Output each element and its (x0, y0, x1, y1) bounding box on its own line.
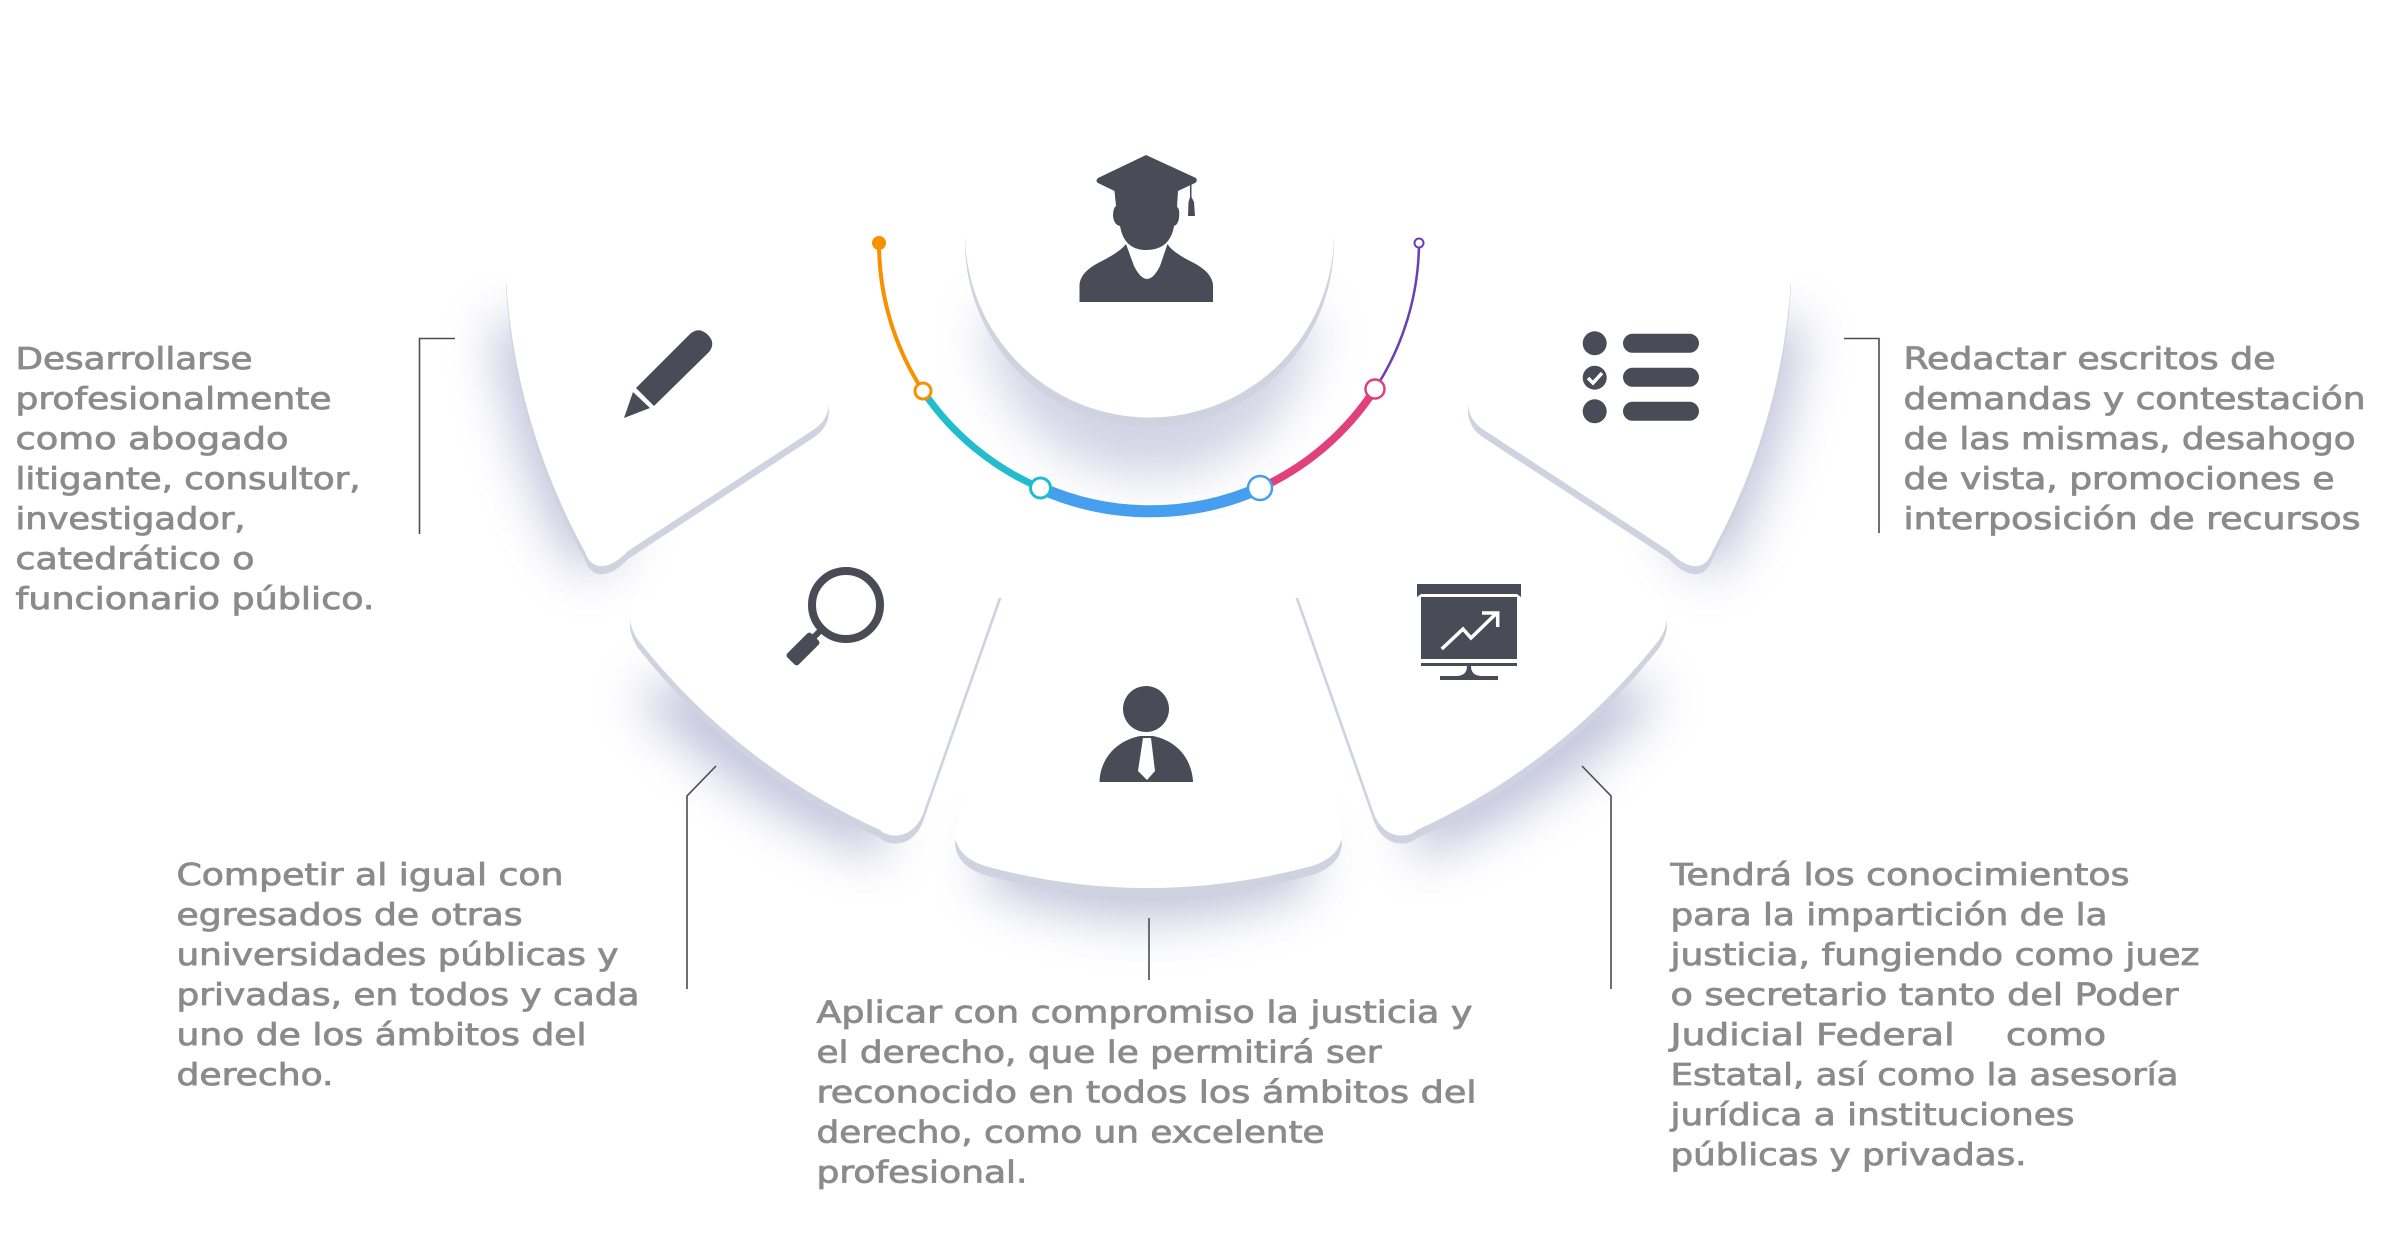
text: tendra: Tendrá los conocimientos (1669, 858, 2130, 893)
text: desarrollarse: como abogado (16, 422, 288, 457)
text: desarrollarse (16, 342, 374, 617)
text: aplicar: Aplicar con compromiso la justicia y (816, 996, 1472, 1030)
text: tendra: para la impartición de la (1670, 898, 2108, 933)
text: redactar: de las mismas, desahogo (1904, 422, 2356, 457)
text: tendra: o secretario tanto del Poder (1670, 978, 2179, 1013)
connector: left bracket (420, 338, 455, 534)
icon: pen (624, 330, 712, 418)
text: tendra (1668, 858, 2200, 1173)
text: competir: egresados de otras (176, 898, 522, 933)
icon: magnifier (785, 571, 880, 667)
icon: presentation board (1417, 584, 1521, 680)
panel: checklist (1468, 200, 1805, 575)
text: tendra: justicia, fungiendo como juez (1669, 938, 2200, 973)
text: tendra: Judicial Federal (1668, 1018, 1954, 1053)
text: redactar: Redactar escritos de (1904, 342, 2276, 377)
connector: center (1148, 918, 1150, 980)
text: aplicar: derecho, como un excelente (816, 1116, 1324, 1150)
text: competir: Competir al igual con (176, 858, 564, 893)
panel: magnifier (630, 590, 1002, 859)
text: aplicar: reconocido en todos los ámbitos del (816, 1076, 1476, 1110)
text: desarrollarse: profesionalmente (16, 382, 332, 417)
text: tendra: como (2006, 1018, 2106, 1053)
panel: graduate semicircle (965, 120, 1334, 476)
text: competir: derecho. (176, 1058, 334, 1093)
text: redactar (1904, 342, 2366, 537)
panel: chart (1296, 590, 1667, 859)
progress arc (872, 236, 1424, 511)
connector: right bracket (1844, 338, 1879, 533)
text: desarrollarse: litigante, consultor, (16, 462, 360, 497)
text: desarrollarse: investigador, (16, 502, 245, 537)
text: redactar: demandas y contestación (1904, 382, 2366, 417)
icon: graduate (1080, 155, 1213, 302)
text: desarrollarse: funcionario público. (16, 582, 374, 617)
connector: lower right (1582, 766, 1611, 989)
text: aplicar: profesional. (816, 1156, 1028, 1190)
connector: lower left (687, 766, 716, 989)
text: competir (176, 858, 640, 1093)
text: tendra: jurídica a instituciones (1669, 1098, 2074, 1133)
text: desarrollarse: Desarrollarse (16, 342, 252, 377)
text: aplicar (816, 996, 1476, 1190)
icon: checklist (1583, 331, 1699, 423)
text: redactar: de vista, promociones e (1904, 462, 2334, 497)
text: tendra: públicas y privadas. (1670, 1138, 2026, 1173)
text: competir: privadas, en todos y cada (176, 978, 640, 1013)
panel: center bottom person (955, 600, 1342, 920)
text: tendra: Estatal, así como la asesoría (1670, 1058, 2178, 1093)
text: desarrollarse: catedrático o (16, 542, 254, 577)
text: redactar: interposición de recursos (1904, 502, 2360, 537)
text: competir: uno de los ámbitos del (176, 1018, 586, 1053)
icon: person with tie (1100, 686, 1193, 782)
text: competir: universidades públicas y (176, 938, 618, 973)
text: aplicar: el derecho, que le permitirá ser (816, 1036, 1382, 1070)
panel: pen (492, 200, 829, 575)
